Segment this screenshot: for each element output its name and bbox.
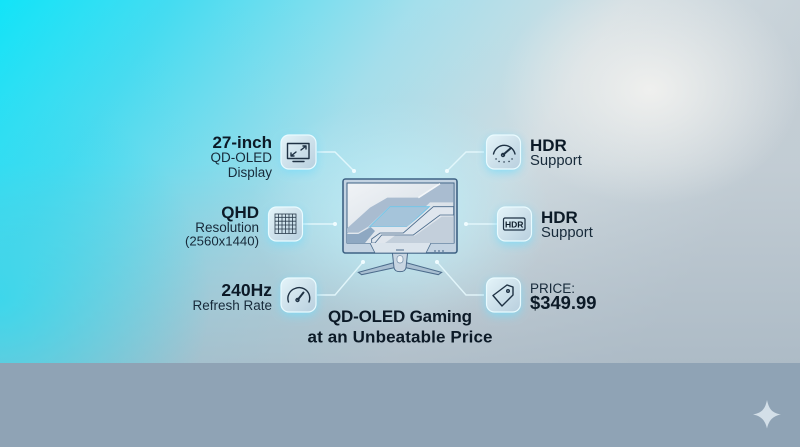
- label: Support: Support: [541, 225, 593, 241]
- label: HDR: HDR: [541, 208, 578, 227]
- panel: HDR support top: [486, 135, 582, 172]
- panel: price: [486, 278, 596, 315]
- title: QD-OLED Gaming: [328, 307, 472, 326]
- icon: price tag: [493, 285, 513, 306]
- label: QD-OLED Display: QD-OLED: [210, 150, 272, 165]
- screen artwork: [347, 184, 454, 243]
- monitor: [343, 179, 457, 275]
- monitor stand: [358, 252, 442, 275]
- label: 27-inch: 27-inch: [212, 133, 272, 152]
- title: at an Unbeatable Price: [308, 328, 492, 346]
- label: QD-OLED Display: Display: [228, 165, 272, 180]
- label: PRICE: PRICE:: [530, 281, 575, 296]
- monitor screen: [347, 183, 454, 243]
- panel: 240Hz refresh rate: [192, 278, 316, 315]
- panel: QHD resolution: [185, 203, 302, 248]
- label: Support: Support: [530, 153, 582, 169]
- icon: sparkle watermark: [753, 400, 781, 428]
- label: $349.99: $349.99: [530, 292, 596, 313]
- panel: HDR support middle: [498, 207, 593, 244]
- label: Resolution (2560x1440): (2560x1440): [185, 234, 259, 248]
- panel: 27-inch display: [210, 133, 316, 180]
- monitor lower bezel detail: [370, 243, 446, 253]
- label: Refresh Rate: Refresh Rate: [192, 298, 272, 313]
- icon: pixel grid: [275, 214, 296, 234]
- label: 240Hz: 240Hz: [221, 280, 272, 300]
- label: QHD: QHD: [221, 203, 259, 222]
- icon: speedometer: [288, 288, 310, 302]
- icon: HDR gauge: [494, 145, 515, 162]
- bottom band: [0, 363, 800, 447]
- label: Resolution (2560x1440): Resolution: [195, 220, 259, 235]
- label: HDR: HDR: [530, 136, 567, 155]
- icon: HDR badge: HDR: [505, 220, 523, 230]
- icon: screen size: [288, 144, 309, 162]
- monitor bezel: [343, 179, 457, 253]
- connector lines: [303, 152, 497, 295]
